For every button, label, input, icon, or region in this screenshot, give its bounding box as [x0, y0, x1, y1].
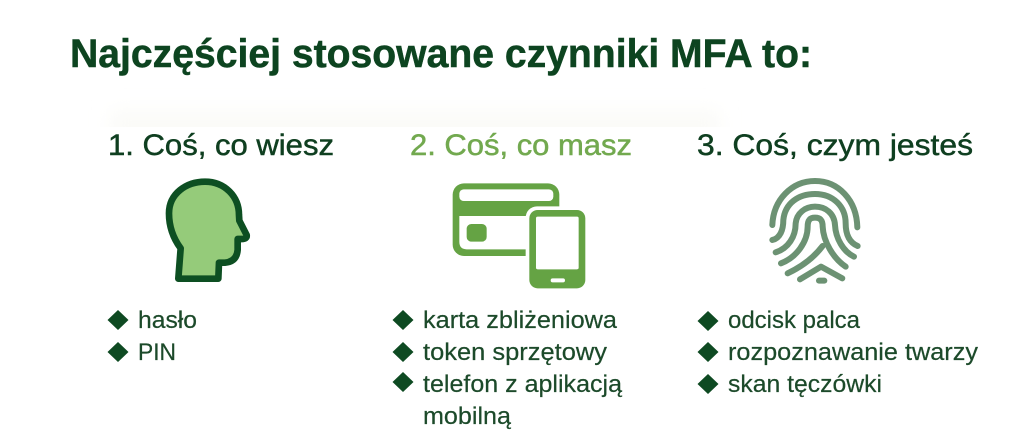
icon: fingerprint [772, 181, 858, 281]
list: are items: rozpoznawanie twarzy [728, 339, 978, 366]
list: have items: telefon z aplikacją [423, 371, 623, 398]
panel: something you are [697, 129, 978, 398]
list: are items [698, 307, 978, 398]
heading: factor 1: 1. Coś, co wiesz [108, 129, 334, 162]
icon: head [169, 182, 247, 279]
panel: something you know [108, 129, 334, 366]
list: are items: skan tęczówki [728, 371, 882, 398]
list: know items: hasło [138, 307, 197, 334]
list: know items [108, 307, 197, 366]
title: Najczęściej stosowane czynniki MFA to: [70, 32, 812, 76]
list: are items: odcisk palca [728, 307, 861, 334]
list: have items [392, 307, 623, 430]
list: know items: PIN [138, 339, 176, 366]
icon: card and phone [453, 183, 589, 292]
list: have items: mobilną [423, 403, 512, 430]
list: have items: karta zbliżeniowa [423, 307, 618, 334]
heading: factor 2: 2. Coś, co masz [410, 129, 632, 162]
heading: factor 3: 3. Coś, czym jesteś [697, 129, 973, 162]
list: have items: token sprzętowy [423, 339, 607, 366]
panel: something you have [392, 129, 632, 430]
